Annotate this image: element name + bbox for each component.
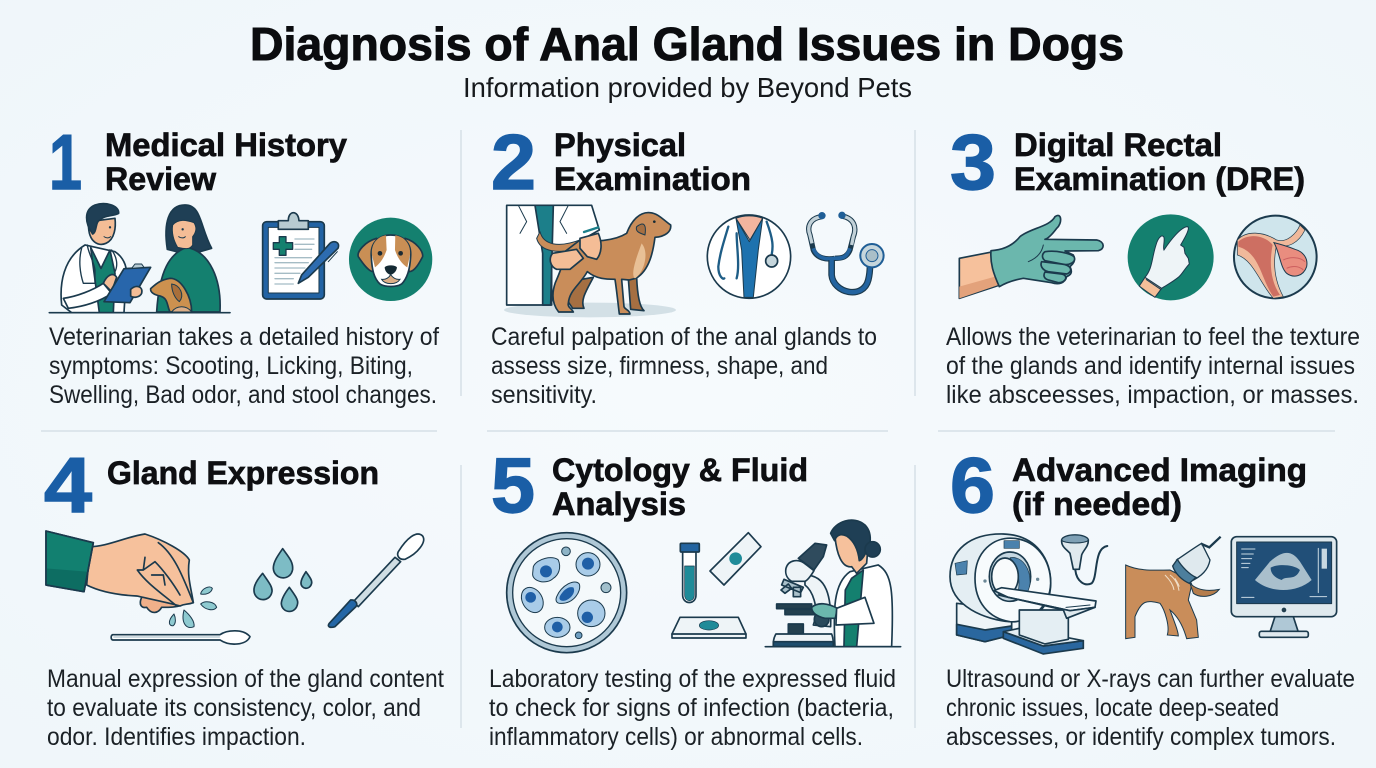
text: step 2 description: sensitivity.: [491, 381, 597, 409]
icon: stethoscope: [809, 212, 884, 292]
heading: cytology and fluid analysis: Analysis: [552, 486, 686, 522]
text: step 1 description: Swelling, Bad odor, and stool changes.: [49, 381, 437, 409]
heading: physical examination: [554, 127, 751, 197]
icon: veterinarian with owner and dog: [49, 204, 230, 313]
number 3: 3: [950, 118, 996, 206]
text: step 4 description: Manual expression of the gland content: [47, 665, 444, 693]
heading: medical history review: Review: [105, 161, 216, 197]
text: step 5 description: to check for signs of infection (bacteria,: [489, 694, 894, 722]
text: step 6 description: [946, 665, 1355, 751]
number 6: 6: [950, 441, 995, 529]
text: step 5 description: Laboratory testing of the expressed fluid: [489, 665, 896, 693]
heading: advanced imaging: (if needed): [1012, 486, 1182, 522]
heading: digital rectal examination: [1014, 127, 1305, 197]
icon: vet examining dog: [504, 205, 676, 317]
text: step 3 description: [946, 323, 1360, 409]
title: Diagnosis of Anal Gland Issues in Dogs: [250, 18, 1124, 70]
number 4: 4: [44, 441, 92, 529]
heading: medical history review: [105, 127, 347, 197]
number 2: 2: [491, 118, 536, 206]
number 1: 1: [49, 118, 82, 206]
panel: step 6 advanced imaging: [946, 441, 1355, 751]
heading: cytology and fluid analysis: Cytology & Fluid: [552, 452, 808, 488]
panel: step 3 digital rectal examination: [946, 118, 1360, 409]
number 5: 5: [491, 441, 535, 529]
heading: cytology and fluid analysis: [552, 452, 808, 522]
text: step 2 description: Careful palpation of the anal glands to: [491, 323, 877, 351]
text: step 2 description: assess size, firmness, shape, and: [491, 352, 828, 380]
panel: step 2 physical examination: [491, 118, 884, 409]
icon: dog face in teal circle: [349, 218, 432, 301]
heading: digital rectal examination: Digital Rectal: [1014, 127, 1222, 163]
text: step 3 description: like absceesses, impaction, or masses.: [946, 381, 1359, 409]
text: step 4 description: to evaluate its consistency, color, and: [47, 694, 421, 722]
icon: ultrasound monitor: [1231, 537, 1337, 637]
heading: gland expression: Gland Expression: [107, 455, 379, 491]
heading: digital rectal examination: Examination (DRE): [1014, 161, 1305, 197]
text: step 4 description: [47, 665, 444, 751]
icon: vet coat with stethoscope in circle: [707, 215, 791, 298]
icon: fluid drops: [254, 549, 312, 611]
icon: swab tube: [328, 534, 424, 627]
heading: medical history review: Medical History: [105, 127, 347, 163]
panel: step 1 medical history review: [49, 118, 439, 409]
icon: test tube and slides: [672, 533, 761, 638]
icon: white gloved finger in teal circle: [1128, 214, 1214, 300]
heading: advanced imaging: Advanced Imaging: [1012, 452, 1307, 488]
text: step 5 description: [489, 665, 896, 751]
icon: MRI scanner: [950, 534, 1096, 654]
text: step 6 description: chronic issues, locate deep-seated: [946, 694, 1279, 722]
text: step 2 description: [491, 323, 877, 409]
heading: advanced imaging: [1012, 452, 1307, 522]
heading: physical examination: Physical: [554, 127, 686, 163]
subtitle: Information provided by Beyond Pets: [463, 72, 912, 103]
icon: clipboard with pen: [263, 213, 339, 299]
text: step 6 description: abscesses, or identify complex tumors.: [946, 723, 1336, 751]
text: step 5 description: inflammatory cells) or abnormal cells.: [489, 723, 863, 751]
heading: physical examination: Examination: [554, 161, 751, 197]
text: step 1 description: Veterinarian takes a detailed history of: [49, 323, 439, 351]
icon: ultrasound probe: [1062, 535, 1107, 584]
panel: step 4 gland expression: [44, 441, 444, 751]
text: step 1 description: symptoms: Scooting, Licking, Biting,: [49, 352, 413, 380]
icon: gloved hand pointing: [959, 215, 1103, 298]
text: step 1 description: [49, 323, 439, 409]
icon: dog with ultrasound probe: [1126, 537, 1221, 639]
text: step 4 description: odor. Identifies impaction.: [47, 723, 306, 751]
icon: hand squeezing gland: [46, 531, 250, 644]
icon: anal gland anatomy circle: [1234, 216, 1317, 298]
icon: cells in petri dish: [507, 533, 627, 653]
icon: scientist at microscope: [765, 520, 901, 647]
panel: step 5 cytology and fluid analysis: [489, 441, 901, 751]
